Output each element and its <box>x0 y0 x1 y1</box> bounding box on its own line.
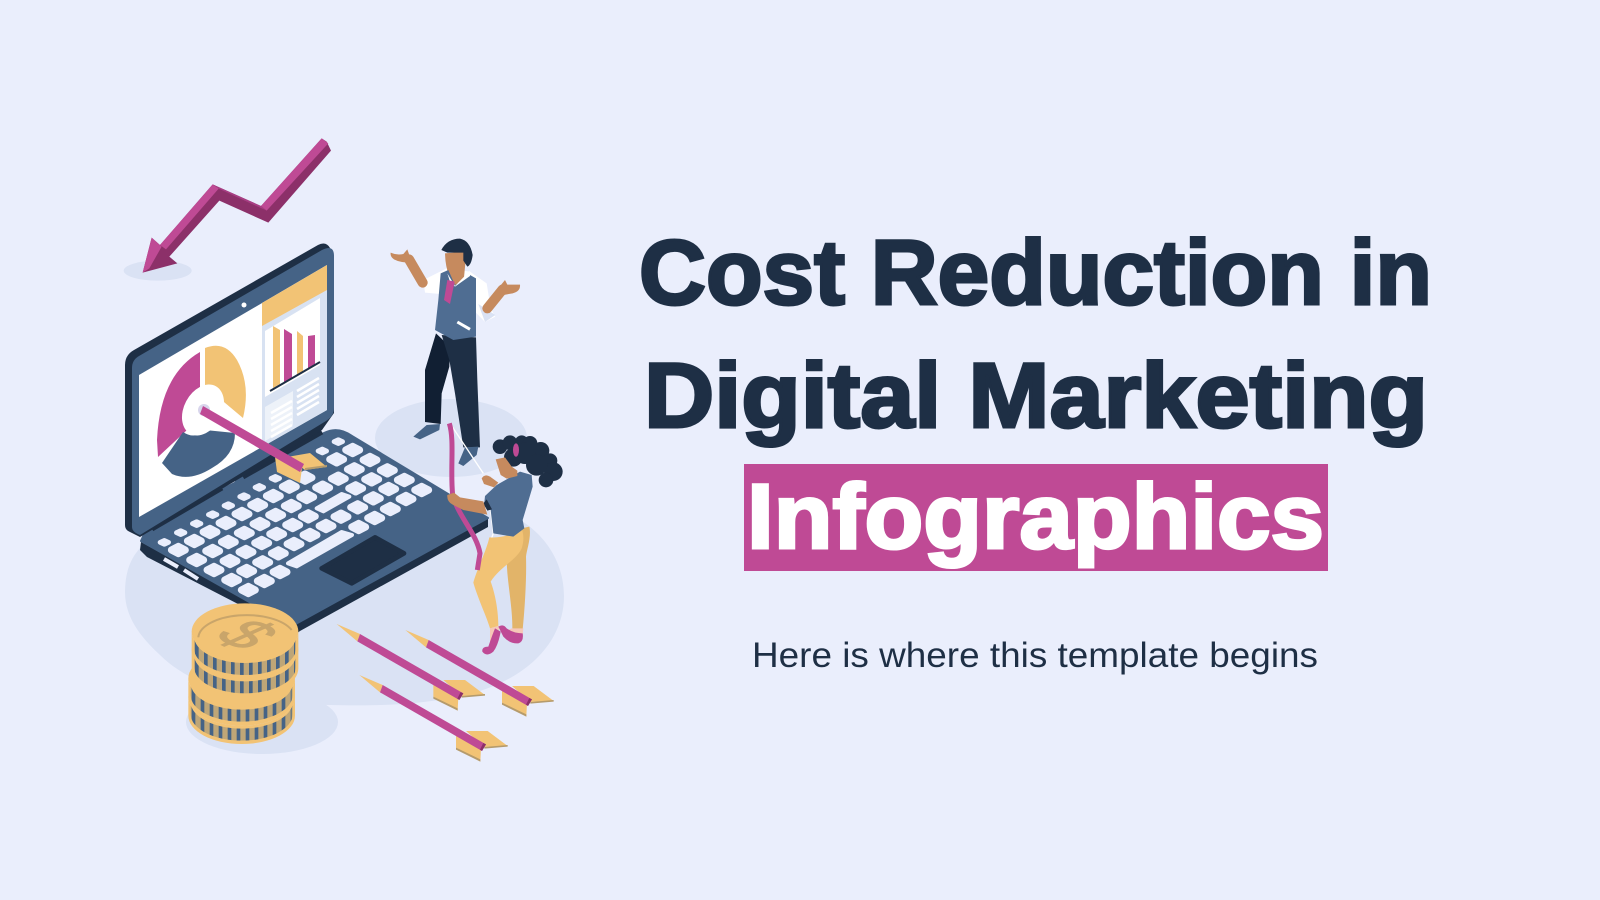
coin ring <box>198 615 292 637</box>
illustration <box>124 138 564 762</box>
pocket <box>457 322 470 329</box>
laptop <box>125 244 488 634</box>
blob shadow <box>125 510 564 705</box>
arrow 3 <box>359 675 508 762</box>
hair <box>441 239 473 267</box>
panel header <box>262 265 327 326</box>
coin 1 <box>192 603 298 678</box>
rear leg <box>507 527 530 629</box>
bow string <box>450 423 493 552</box>
coin 2 <box>192 622 298 697</box>
slide <box>124 138 1428 762</box>
bow <box>449 423 480 570</box>
title <box>639 222 1432 571</box>
front arm <box>447 493 487 515</box>
coin 3 <box>188 650 295 725</box>
trackpad <box>322 537 404 583</box>
front leg <box>473 528 523 628</box>
front slits <box>164 480 234 579</box>
arms <box>391 249 520 308</box>
coin shadow <box>186 690 338 754</box>
back arm <box>482 475 498 487</box>
torso <box>484 472 533 537</box>
tie <box>444 280 455 304</box>
title line 3: Infographics <box>747 466 1324 568</box>
face <box>496 457 517 479</box>
laptop lid <box>125 244 334 537</box>
side panel <box>262 265 327 447</box>
hinge slots <box>152 432 322 529</box>
vest <box>435 270 476 340</box>
icon: falling trend arrow <box>124 138 331 281</box>
pants <box>425 333 450 424</box>
hair <box>493 435 563 487</box>
person: man with vest <box>391 239 520 466</box>
bar chart <box>270 326 320 391</box>
bar chart panel <box>265 298 320 397</box>
text lines <box>265 378 319 441</box>
man shadow <box>375 399 527 477</box>
shoes <box>413 424 440 439</box>
shirt <box>423 268 495 322</box>
laptop base <box>140 430 488 634</box>
collar <box>447 271 470 287</box>
arrow stuck in screen <box>200 406 327 483</box>
coin stack <box>188 603 298 744</box>
arrows on floor <box>337 624 554 762</box>
donut chart <box>157 346 246 477</box>
shoes <box>482 625 523 654</box>
arrow 2 <box>405 630 554 717</box>
person: woman archer <box>447 423 563 654</box>
title line 1: Cost Reduction in <box>639 222 1432 324</box>
dollar sign: $ <box>198 612 295 657</box>
highlight bar <box>744 464 1328 571</box>
socks <box>490 626 499 645</box>
arrow 1 <box>337 624 485 711</box>
subtitle: Here is where this template begins <box>752 636 1318 675</box>
screen <box>139 265 327 517</box>
camera <box>242 302 246 308</box>
hair band <box>513 443 519 457</box>
title line 2: Digital Marketing <box>644 345 1428 447</box>
neck and face <box>445 252 465 286</box>
keyboard <box>160 440 429 594</box>
coin 4 <box>188 669 295 744</box>
